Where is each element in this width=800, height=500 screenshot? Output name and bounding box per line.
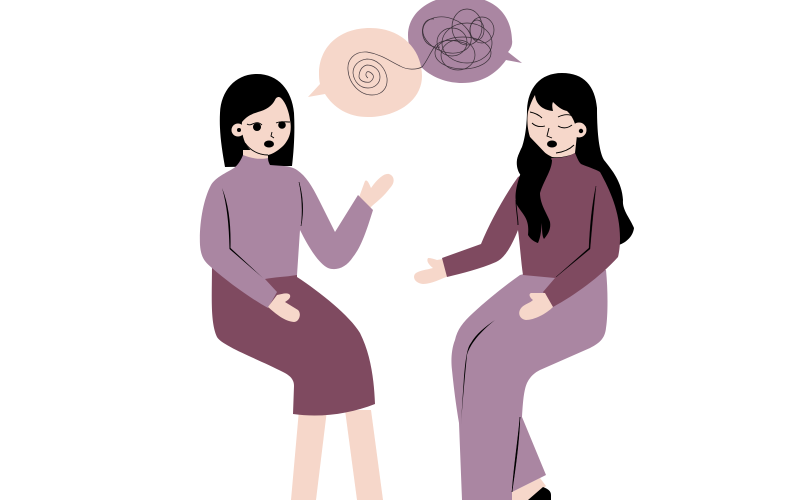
figure: right woman <box>414 73 634 500</box>
right woman back hair <box>522 73 634 245</box>
right woman pants fold lines <box>461 320 520 492</box>
left woman legs <box>291 410 383 500</box>
speech bubble: tangled thoughts <box>408 0 522 83</box>
left woman sweater <box>200 155 373 308</box>
left woman raised hand <box>358 174 394 210</box>
right woman sweater <box>442 153 620 307</box>
right woman face <box>527 95 586 157</box>
right woman left hand <box>414 258 449 284</box>
right woman front hair over sweater <box>516 137 552 243</box>
left woman hair <box>220 74 294 167</box>
right woman pants <box>451 265 608 500</box>
right woman foot and shoe <box>512 478 551 500</box>
right woman sweater fold lines <box>556 186 596 277</box>
left woman face <box>232 97 291 165</box>
left woman sweater fold lines <box>222 182 303 278</box>
left woman skirt <box>212 265 375 416</box>
figure: left woman <box>200 74 394 500</box>
right woman lap hand <box>519 293 553 320</box>
speech bubble: calm spiral <box>308 28 467 117</box>
left woman lap hand <box>268 293 300 322</box>
right woman hair strand highlights <box>516 140 523 225</box>
